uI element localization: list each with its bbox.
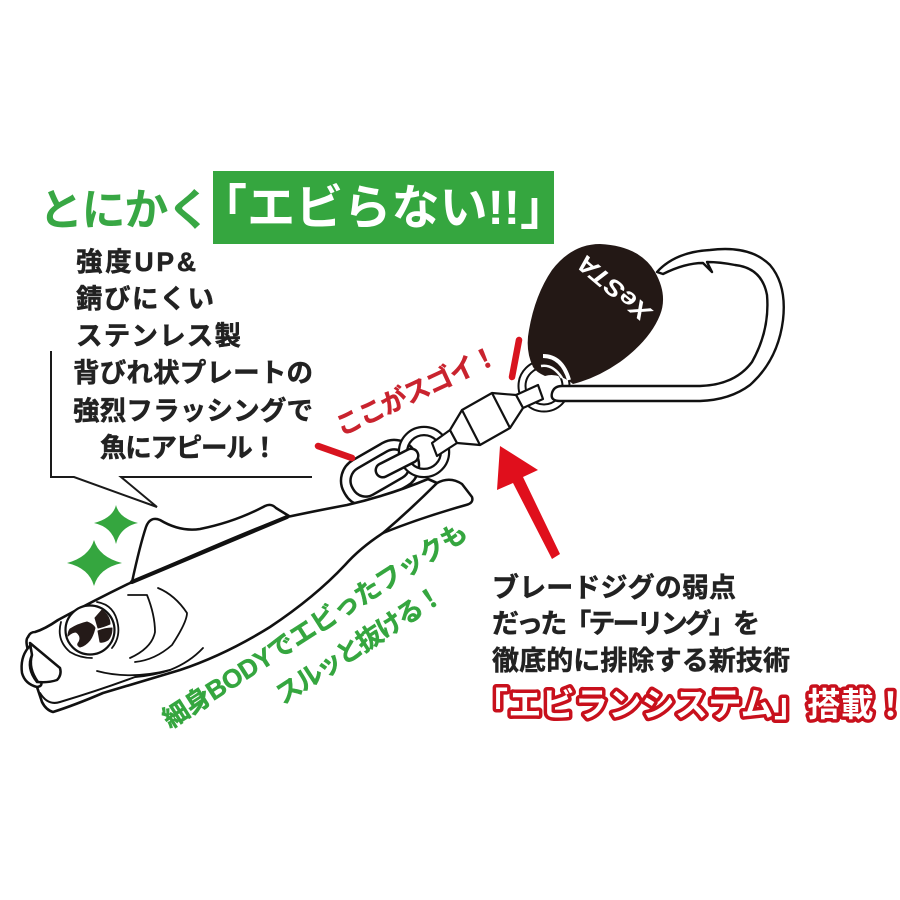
icon: barrel swivel — [432, 385, 543, 456]
callout: dorsal plate text: 強烈フラッシングで — [73, 396, 313, 426]
arrow: red pointing to swivel — [497, 446, 560, 559]
text block: slim body green: 細身BODYでエビったフックも — [157, 516, 473, 734]
title: とにかく — [39, 186, 211, 235]
callout: dorsal plate text: 背びれ状プレートの — [73, 358, 313, 388]
callout: dorsal plate text: 魚にアピール！ — [100, 433, 278, 463]
blade logo: XeSTA — [572, 249, 658, 328]
title: 「エビらない!!」 — [199, 182, 568, 235]
callout: dorsal plate text — [51, 247, 313, 507]
text block: blade jig weakness: 徹底的に排除する新技術 — [492, 646, 790, 676]
fish mouth — [22, 643, 170, 703]
icon: snap link and ring — [339, 431, 445, 508]
icon: black blade — [528, 244, 663, 384]
fish tail — [383, 480, 472, 533]
callout: dorsal plate text: 強度UP& — [76, 247, 196, 277]
text block: blade jig weakness: 「エビランシステム」搭載！ — [475, 686, 900, 723]
label: here is amazing: ここがスゴイ！ — [331, 340, 503, 441]
text block: blade jig weakness: ブレードジグの弱点 — [492, 572, 736, 603]
text block: blade jig weakness: だった「テーリング」を — [492, 608, 760, 639]
fish lure illustration — [22, 479, 472, 712]
callout: dorsal plate text: ステンレス製 — [76, 321, 241, 351]
text block: blade jig weakness — [475, 572, 900, 723]
fish dorsal fin — [132, 505, 289, 582]
fish back ridge — [132, 517, 287, 582]
fish body — [26, 479, 437, 712]
title — [39, 171, 568, 244]
icon: green sparkles — [67, 505, 138, 586]
fish eye — [60, 602, 118, 658]
icon: hook — [552, 249, 784, 401]
icon: swivel ring — [522, 364, 566, 408]
text block: slim body green: スルッと抜ける！ — [270, 579, 449, 710]
callout: dorsal plate text: 錆びにくい — [76, 284, 214, 314]
fish gill lines — [97, 588, 203, 675]
